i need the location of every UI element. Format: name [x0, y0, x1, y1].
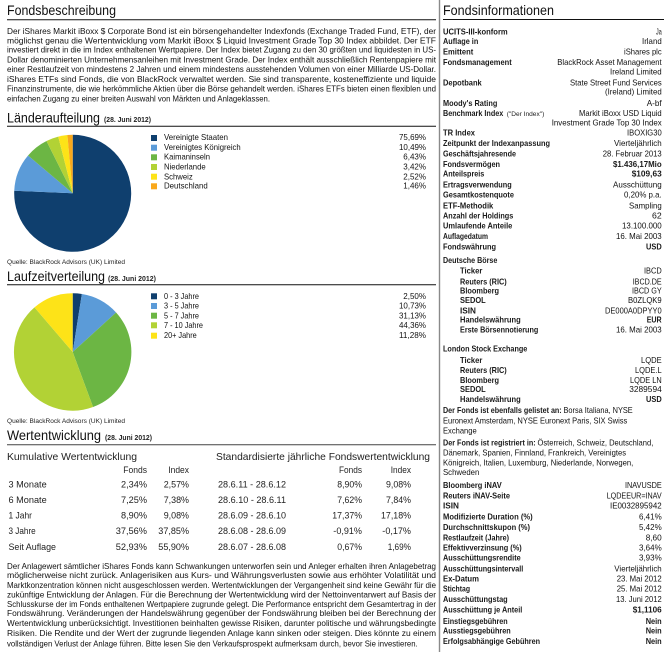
table: annual performance: Fonds: [339, 465, 362, 476]
table: cumulative performance: 55,90%: [158, 542, 189, 553]
fund facts list: Fondsmanagement: [443, 57, 512, 67]
listing: Deutsche Börse: IBCD: [644, 266, 662, 276]
listing: Deutsche Börse: DE000A0DPYY0: [605, 305, 662, 315]
legend: maturities: 31,13%: [399, 310, 427, 320]
table: annual performance: 17,37%: [332, 510, 362, 521]
table: annual performance: 28.6.09 - 28.6.10: [218, 510, 286, 521]
fund facts list: Ausschüttung: [613, 179, 662, 189]
identifiers and key figures list: INAVUSDE: [625, 480, 662, 490]
listing: Deutsche Börse: Handelswährung: [460, 314, 521, 324]
text block: fund description: möglichst genau die Wertentwicklung vom Markit iBoxx $ Liquid Investment Grade Top 30 Index abbildet. Der ETF: [7, 35, 436, 45]
table: cumulative performance: Seit Auflage: [8, 542, 56, 553]
table: annual performance: 17,18%: [381, 510, 411, 521]
table: cumulative performance: 8,90%: [121, 510, 147, 521]
heading: Laufzeitverteilung: (28. Juni 2012): [108, 276, 156, 283]
table: cumulative performance: Index: [168, 465, 189, 476]
table: annual performance: Index: [391, 465, 411, 476]
table: cumulative performance: 3 Monate: [8, 480, 47, 491]
listing: Deutsche Börse: 16. Mai 2003: [616, 325, 662, 335]
listing: London Stock Exchange: USD: [646, 394, 662, 404]
identifiers and key figures list: 13. Juni 2012: [616, 594, 662, 604]
listing: Deutsche Börse: Erste Börsennotierung: [460, 325, 538, 335]
table: annual performance: 28.6.08 - 28.6.09: [218, 526, 286, 537]
table: annual performance: 28.6.10 - 28.6.11: [218, 495, 286, 506]
fund facts list: Markit iBoxx USD Liquid: [579, 108, 662, 118]
table: cumulative performance: 7,25%: [121, 495, 147, 506]
legend: maturities: 20+ Jahre: [164, 330, 197, 340]
identifiers and key figures list: Bloomberg iNAV: [443, 480, 502, 490]
identifiers and key figures list: Ausschüttung je Anteil: [443, 605, 522, 615]
identifiers and key figures list: 5,42%: [639, 522, 662, 532]
listing: Deutsche Börse: Deutsche Börse: [443, 255, 498, 265]
fund facts list: Gesamtkostenquote: [443, 190, 514, 200]
heading: Wertentwicklung: Wertentwicklung: [7, 428, 101, 443]
table: annual performance: 0,67%: [337, 542, 362, 553]
text block: risk disclaimer: Marktkonzentration können nicht ausgeschlossen werden. Wertentwicklungen der Vergangenheit sind keine Gewähr für die: [7, 580, 436, 590]
legend: maturities: 44,36%: [399, 320, 427, 330]
pie chart: maturities: [14, 293, 131, 411]
fund facts list: UCITS-III-konform: [443, 26, 508, 36]
text block: other listings: Exchange: [443, 426, 477, 436]
text block: risk disclaimer: Der Anlagewert sämtlicher iShares Fonds kann Schwankungen unterworfen sein und Anleger erhalten ihren Anlagebetrag: [7, 561, 436, 571]
identifiers and key figures list: Durchschnittskupon (%): [443, 522, 530, 532]
listing: London Stock Exchange: Handelswährung: [460, 394, 521, 404]
legend: countries: Vereinigte Staaten: [164, 132, 228, 142]
fund facts list: Vierteljährlich: [614, 138, 662, 148]
text block: other listings: Euronext Amsterdam, NYSE Euronext Paris, SIX Swiss: [443, 415, 627, 425]
table: cumulative performance: 9,08%: [164, 510, 189, 521]
text block: registrations: [443, 437, 653, 477]
legend: countries: 10,49%: [399, 142, 427, 152]
table: annual performance: 7,62%: [337, 495, 362, 506]
fund facts list: ETF-Methodik: [443, 200, 494, 210]
text block: risk disclaimer: [7, 561, 436, 648]
fund facts list: iShares plc: [624, 46, 662, 56]
legend: maturities: 2,50%: [403, 291, 427, 301]
heading: Länderaufteilung: (28. Juni 2012): [104, 117, 151, 124]
panel: Fondsinformationen: [443, 3, 664, 646]
source note: Quelle: BlackRock Advisors (UK) Limited: [7, 259, 125, 266]
identifiers and key figures list: [443, 480, 662, 646]
table: annual performance: 9,08%: [386, 480, 411, 491]
identifiers and key figures list: IE0032895942: [610, 500, 662, 510]
fund facts list: ("Der Index"): [507, 111, 544, 118]
legend: maturities: 7 - 10 Jahre: [164, 320, 203, 330]
fund facts list: $109,63: [632, 169, 662, 179]
listing: Deutsche Börse: Reuters (RIC): [460, 276, 507, 286]
table: annual performance: 7,84%: [386, 495, 411, 506]
heading: Fondsinformationen: Fondsinformationen: [443, 3, 554, 18]
fund facts list: 28. Februar 2013: [603, 148, 662, 158]
text block: fund description: Dollar denominierten Unternehmensanleihen mit Investment Grade. Der Index enthält ausschließlich Rentenpapiere mit: [7, 54, 437, 64]
text block: risk disclaimer: Wertentwicklung unberücksichtigt. Investitionen beinhalten gewisse Risiken, darunter politische und währungsbedingte: [7, 618, 436, 628]
table: cumulative performance: 1 Jahr: [8, 510, 33, 521]
text block: other listings: Borsa Italiana, NYSE: [564, 405, 633, 415]
table: annual performance: 28.6.07 - 28.6.08: [218, 542, 286, 553]
pie chart: countries: [14, 135, 131, 252]
identifiers and key figures list: Ausstiegsgebühren: [443, 626, 511, 636]
source note: Quelle: BlackRock Advisors (UK) Limited: [7, 418, 125, 425]
listing: Deutsche Börse: Ticker: [460, 266, 483, 276]
identifiers and key figures list: $1,1106: [633, 605, 662, 615]
listing: London Stock Exchange: Reuters (RIC): [460, 365, 507, 375]
listing: Deutsche Börse: IBCD.DE: [633, 276, 662, 286]
legend: maturities: 10,73%: [399, 301, 427, 311]
identifiers and key figures list: Ausschüttungsrendite: [443, 552, 521, 562]
text block: registrations: Österreich, Schweiz, Deutschland,: [538, 437, 653, 447]
identifiers and key figures list: Effektivverzinsung (%): [443, 543, 522, 553]
identifiers and key figures list: Nein: [646, 626, 662, 636]
fund facts list: Fondsvermögen: [443, 159, 500, 169]
listing: Deutsche Börse: B0ZLQK9: [628, 295, 662, 305]
table: cumulative performance: Kumulative Wertentwicklung: [7, 452, 137, 463]
table: cumulative performance: 3 Jahre: [8, 526, 36, 537]
fund facts list: Sampling: [629, 200, 662, 210]
text block: risk disclaimer: vollständigen Verlust der Anlage führen. Bitte lesen Sie den Verkaufsprospekt aufmerksam durch, bevor Sie investieren.: [7, 638, 418, 648]
table: annual performance: 28.6.11 - 28.6.12: [218, 480, 286, 491]
fund facts list: Auflagedatum: [443, 231, 488, 241]
legend: countries: Niederlande: [164, 162, 206, 172]
fund facts list: 0,20% p.a.: [624, 190, 662, 200]
table: annual performance: Standardisierte jährliche Fondswertentwicklung: [216, 452, 430, 463]
identifiers and key figures list: Erfolgsabhängige Gebühren: [443, 636, 540, 646]
panel: Fondsbeschreibung: [7, 3, 437, 103]
listing: Deutsche Börse: Bloomberg: [460, 285, 499, 295]
legend: countries: [151, 132, 427, 190]
text block: fund description: investiert direkt in die im Index enthaltenen Wertpapiere. Der Index bietet Zugang zu den 30 größten und liquidesten in US-: [7, 45, 436, 55]
legend: maturities: 3 - 5 Jahre: [164, 301, 199, 311]
fund facts list: BlackRock Asset Management: [557, 57, 662, 67]
fund facts list: 13.100.000: [622, 221, 662, 231]
listing: London Stock Exchange: Ticker: [460, 355, 483, 365]
table: cumulative performance: 7,38%: [164, 495, 189, 506]
text block: fund description: iShares ETFs sind Fonds, die von BlackRock verwaltet werden. Sie sind transparente, kosteneffiziente und liquide: [7, 74, 436, 84]
table: annual performance: 8,90%: [337, 480, 362, 491]
listing: Deutsche Börse: [443, 255, 662, 335]
text block: registrations: Schweden: [443, 467, 480, 477]
fund facts list: Geschäftsjahresende: [443, 148, 516, 158]
panel: Länderaufteilung: [7, 110, 436, 266]
legend: countries: 2,52%: [403, 172, 427, 182]
fund facts list: 62: [652, 211, 662, 221]
identifiers and key figures list: Vierteljährlich: [614, 563, 662, 573]
text block: other listings: Der Fonds ist ebenfalls gelistet an:: [443, 405, 562, 415]
text block: registrations: Dänemark, Spanien, Finnland, Frankreich, Vereinigtes: [443, 447, 626, 457]
identifiers and key figures list: 8,60: [646, 532, 662, 542]
fund facts list: Anzahl der Holdings: [443, 211, 514, 221]
identifiers and key figures list: Nein: [646, 616, 662, 626]
text block: risk disclaimer: Schlusskurse der im Fonds enthaltenen Wertpapiere zugrunde gelegt. Die Performance entspricht dem Gesamtertrag in der: [7, 599, 436, 609]
fund facts list: IBOXIG30: [627, 128, 662, 138]
identifiers and key figures list: 23. Mai 2012: [617, 573, 662, 583]
fund facts list: TR Index: [443, 128, 475, 138]
identifiers and key figures list: Ex-Datum: [443, 573, 479, 583]
listing: Deutsche Börse: SEDOL: [460, 295, 486, 305]
heading: Fondsbeschreibung: Fondsbeschreibung: [7, 3, 116, 18]
fund facts list: 16. Mai 2003: [616, 231, 662, 241]
identifiers and key figures list: Restlaufzeit (Jahre): [443, 532, 509, 542]
fund facts list: Depotbank: [443, 77, 482, 87]
listing: Deutsche Börse: ISIN: [460, 305, 476, 315]
legend: countries: 3,42%: [403, 162, 427, 172]
legend: maturities: 0 - 3 Jahre: [164, 291, 199, 301]
legend: countries: 75,69%: [399, 132, 427, 142]
text block: registrations: Der Fonds ist registriert in:: [443, 437, 536, 447]
identifiers and key figures list: Reuters iNAV-Seite: [443, 491, 510, 501]
fund facts list: Fondswährung: [443, 242, 496, 252]
table: cumulative performance: 2,34%: [121, 480, 147, 491]
text block: other listings: [443, 405, 633, 436]
heading: Wertentwicklung: (28. Juni 2012): [105, 435, 152, 442]
identifiers and key figures list: LQDEEUR=INAV: [607, 491, 662, 501]
panel: Wertentwicklung: [7, 428, 436, 648]
listing: London Stock Exchange: LQDE: [641, 355, 662, 365]
fund facts list: Moody's Rating: [443, 98, 497, 108]
table: annual performance: -0,91%: [333, 526, 362, 537]
fund facts list: (Ireland) Limited: [605, 87, 662, 97]
identifiers and key figures list: ISIN: [443, 500, 459, 510]
text block: risk disclaimer: möglicherweise nicht zurück. Anlagerisiken aus Kurs- und Währungsverlusten sowie aus erhöhter Volatilität und: [7, 570, 436, 580]
fund facts list: Umlaufende Anteile: [443, 221, 513, 231]
identifiers and key figures list: 3,93%: [639, 552, 662, 562]
fund facts list: A-bf: [647, 98, 662, 108]
table: cumulative performance: [7, 452, 189, 553]
listing: London Stock Exchange: [443, 344, 662, 404]
identifiers and key figures list: 3,64%: [639, 543, 662, 553]
fund facts list: Ja: [656, 26, 662, 36]
table: annual performance: [216, 452, 430, 553]
text block: fund description: Der iShares Markit iBoxx $ Corporate Bond ist ein börsengehandelter Indexfonds (Exchange Traded Fund, ETF), der: [7, 26, 436, 36]
fund facts list: Anteilspreis: [443, 169, 485, 179]
table: cumulative performance: 37,56%: [116, 526, 147, 537]
listing: Deutsche Börse: EUR: [647, 314, 662, 324]
heading: Laufzeitverteilung: Laufzeitverteilung: [7, 269, 105, 284]
legend: countries: 1,46%: [403, 180, 427, 190]
legend: countries: Schweiz: [164, 172, 193, 182]
listing: London Stock Exchange: London Stock Exchange: [443, 344, 528, 354]
legend: maturities: [151, 291, 427, 340]
fund facts list: Ireland Limited: [610, 66, 662, 76]
table: cumulative performance: Fonds: [123, 465, 147, 476]
text block: registrations: Königreich, Italien, Luxemburg, Niederlande, Norwegen,: [443, 457, 633, 467]
fund facts list: Irland: [642, 36, 662, 46]
fund facts list: Emittent: [443, 46, 474, 56]
identifiers and key figures list: Modifizierte Duration (%): [443, 511, 533, 521]
fund facts list: Investment Grade Top 30 Index: [552, 117, 662, 127]
legend: countries: Vereinigtes Königreich: [164, 142, 241, 152]
identifiers and key figures list: Ausschüttungsintervall: [443, 563, 523, 573]
fund facts list: USD: [646, 242, 662, 252]
text block: fund description: Finanzinstrumente, die wie herkömmliche Aktien über die Börse gehandelt werden. iShares ETFs bieten einen flexiblen und: [7, 83, 436, 93]
text block: risk disclaimer: Risiken. Die Rendite und der Wert der zugrunde liegenden Anlage kann sinken oder steigen. Dies könnte zu einem: [7, 628, 436, 638]
table: cumulative performance: 37,85%: [158, 526, 189, 537]
identifiers and key figures list: 6,41%: [639, 511, 662, 521]
identifiers and key figures list: Stichtag: [443, 583, 470, 593]
legend: countries: Kaimaninseln: [164, 152, 210, 162]
table: cumulative performance: 2,57%: [164, 480, 189, 491]
legend: maturities: 5 - 7 Jahre: [164, 310, 199, 320]
text block: fund description: [7, 26, 437, 103]
listing: London Stock Exchange: 3289594: [629, 384, 662, 394]
fund facts list: Auflage in: [443, 36, 478, 46]
fund facts list: Ertragsverwendung: [443, 179, 512, 189]
legend: countries: Deutschland: [164, 180, 208, 190]
panel: Laufzeitverteilung: [7, 269, 436, 425]
listing: London Stock Exchange: Bloomberg: [460, 375, 499, 385]
table: cumulative performance: 52,93%: [116, 542, 147, 553]
listing: London Stock Exchange: SEDOL: [460, 384, 486, 394]
fund facts list: State Street Fund Services: [570, 77, 662, 87]
listing: London Stock Exchange: LQDE.L: [635, 365, 662, 375]
identifiers and key figures list: Ausschüttungstag: [443, 594, 508, 604]
table: annual performance: 1,69%: [388, 542, 411, 553]
text block: fund description: einfachen Zugang zu einer breiten Auswahl von Märkten und Anlageklassen.: [7, 93, 270, 103]
heading: Wertentwicklung: [7, 428, 152, 443]
identifiers and key figures list: Einstiegsgebühren: [443, 616, 508, 626]
fund facts list: $1.436,17Mio: [613, 159, 662, 169]
table: annual performance: -0,17%: [382, 526, 411, 537]
text block: risk disclaimer: zukünftige Entwicklung der Anlagen. Für die Berechnung der Wertentwicklung wird der Nettoinventarwert auf Basis der: [7, 590, 436, 600]
legend: maturities: 11,28%: [399, 330, 427, 340]
legend: countries: 6,43%: [403, 152, 427, 162]
listing: London Stock Exchange: LQDE LN: [630, 375, 662, 385]
identifiers and key figures list: Nein: [646, 636, 662, 646]
fund facts list: Benchmark Index: [443, 108, 504, 118]
table: cumulative performance: 6 Monate: [8, 495, 47, 506]
text block: risk disclaimer: Fondswährung. Veränderungen der Handelswährung gegenüber der Fondswährung bleiben bei der Berechnung der: [7, 608, 436, 618]
listing: Deutsche Börse: IBCD GY: [632, 285, 662, 295]
fund facts list: Zeitpunkt der Indexanpassung: [443, 138, 550, 148]
identifiers and key figures list: 25. Mai 2012: [617, 583, 662, 593]
text block: fund description: einer Restlaufzeit von mindestens 2 Jahren und einem mindestens ausstehenden Volumen von einer Milliarde US-Dollar.: [7, 64, 436, 74]
fund facts list: [443, 26, 662, 252]
heading: Länderaufteilung: Länderaufteilung: [7, 110, 100, 125]
